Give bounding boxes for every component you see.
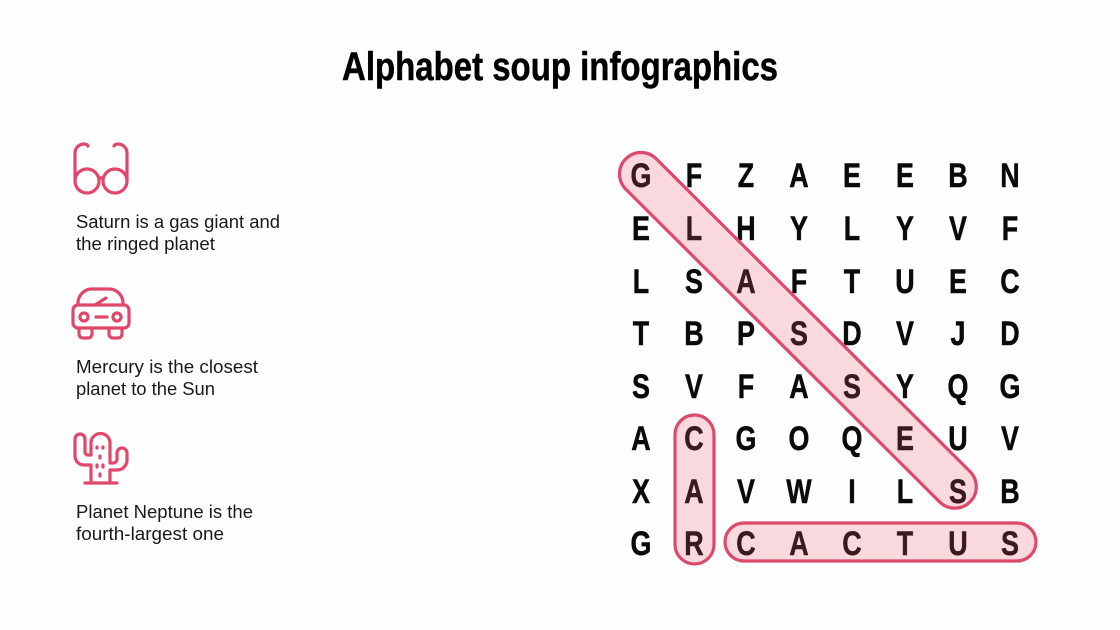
- item: glasses: [75, 144, 280, 254]
- text: Neptune: Planet Neptune is the: [76, 501, 253, 522]
- letter grid: R: [684, 524, 704, 563]
- letter grid: A: [789, 367, 809, 406]
- letter grid: S: [632, 367, 650, 406]
- letter grid: N: [1000, 156, 1020, 195]
- letter grid: A: [631, 419, 651, 458]
- letter grid: C: [684, 419, 704, 458]
- letter grid: V: [737, 472, 755, 511]
- text: Neptune: [76, 501, 253, 544]
- letter grid: D: [842, 314, 862, 353]
- text: Saturn: [76, 211, 280, 254]
- letter grid: J: [951, 314, 965, 353]
- letter grid: V: [685, 367, 703, 406]
- letter grid: V: [1001, 419, 1019, 458]
- item: car: [73, 289, 258, 399]
- text: Saturn: the ringed planet: [76, 233, 215, 254]
- title: Alphabet soup infographics: [342, 45, 778, 89]
- letter grid: G: [631, 524, 651, 563]
- letter grid: E: [632, 209, 650, 248]
- letter grid: G: [631, 156, 651, 195]
- letter grid: V: [949, 209, 967, 248]
- letter grid: Z: [738, 156, 754, 195]
- letter grid: T: [844, 262, 860, 301]
- letter grid: I: [848, 472, 856, 511]
- item: cactus: [75, 434, 253, 544]
- letter grid: F: [791, 262, 807, 301]
- letter grid: A: [736, 262, 756, 301]
- highlight: horizontal word CACTUS: [725, 523, 1036, 561]
- letter grid: D: [1000, 314, 1020, 353]
- letter grid: S: [685, 262, 703, 301]
- letter grid: O: [789, 419, 809, 458]
- letter grid: F: [1002, 209, 1018, 248]
- letter grid: A: [684, 472, 704, 511]
- text: Mercury: [76, 356, 258, 399]
- letter grid: H: [736, 209, 756, 248]
- letter grid: S: [949, 472, 967, 511]
- letter grid: X: [632, 472, 650, 511]
- letter grid: V: [896, 314, 914, 353]
- letter grid: G: [736, 419, 756, 458]
- icon: glasses: [75, 144, 127, 193]
- letter grid: C: [1000, 262, 1020, 301]
- letter grid: C: [842, 524, 862, 563]
- letter grid: S: [843, 367, 861, 406]
- letter grid: L: [633, 262, 649, 301]
- letter grid: L: [686, 209, 702, 248]
- letter grid: Y: [790, 209, 808, 248]
- letter grid: F: [738, 367, 754, 406]
- word search: [611, 144, 1036, 564]
- letter grid: C: [736, 524, 756, 563]
- icon: cactus: [75, 434, 127, 483]
- letter grid: A: [789, 524, 809, 563]
- letter grid: T: [633, 314, 649, 353]
- letter grid: L: [844, 209, 860, 248]
- text: Mercury: planet to the Sun: [76, 378, 215, 399]
- letter grid: S: [1001, 524, 1019, 563]
- letter grid: T: [897, 524, 913, 563]
- letter grid: E: [843, 156, 861, 195]
- letter grid: Q: [948, 367, 968, 406]
- letter grid: U: [948, 419, 968, 458]
- letter grid: Y: [896, 209, 914, 248]
- letter grid: E: [949, 262, 967, 301]
- letter grid: U: [895, 262, 915, 301]
- letter grid: L: [897, 472, 913, 511]
- letter grid: S: [790, 314, 808, 353]
- letter grid: E: [896, 419, 914, 458]
- letter grid: P: [737, 314, 755, 353]
- letter grid: A: [789, 156, 809, 195]
- highlight: vertical word CAR: [675, 415, 714, 564]
- letter grid: W: [786, 472, 812, 511]
- text: Saturn: Saturn is a gas giant and: [76, 211, 280, 232]
- letter grid: Y: [896, 367, 914, 406]
- highlight: diagonal word GLASSES: [611, 144, 985, 517]
- text: Mercury: Mercury is the closest: [76, 356, 258, 377]
- letter grid: U: [948, 524, 968, 563]
- letter grid: B: [1000, 472, 1020, 511]
- icon: car: [73, 289, 129, 338]
- letter grid: E: [896, 156, 914, 195]
- letter grid: F: [686, 156, 702, 195]
- letter grid: [631, 156, 1020, 563]
- letter grid: G: [1000, 367, 1020, 406]
- text: Neptune: fourth-largest one: [76, 523, 224, 544]
- letter grid: B: [948, 156, 968, 195]
- letter grid: B: [684, 314, 704, 353]
- letter grid: Q: [842, 419, 862, 458]
